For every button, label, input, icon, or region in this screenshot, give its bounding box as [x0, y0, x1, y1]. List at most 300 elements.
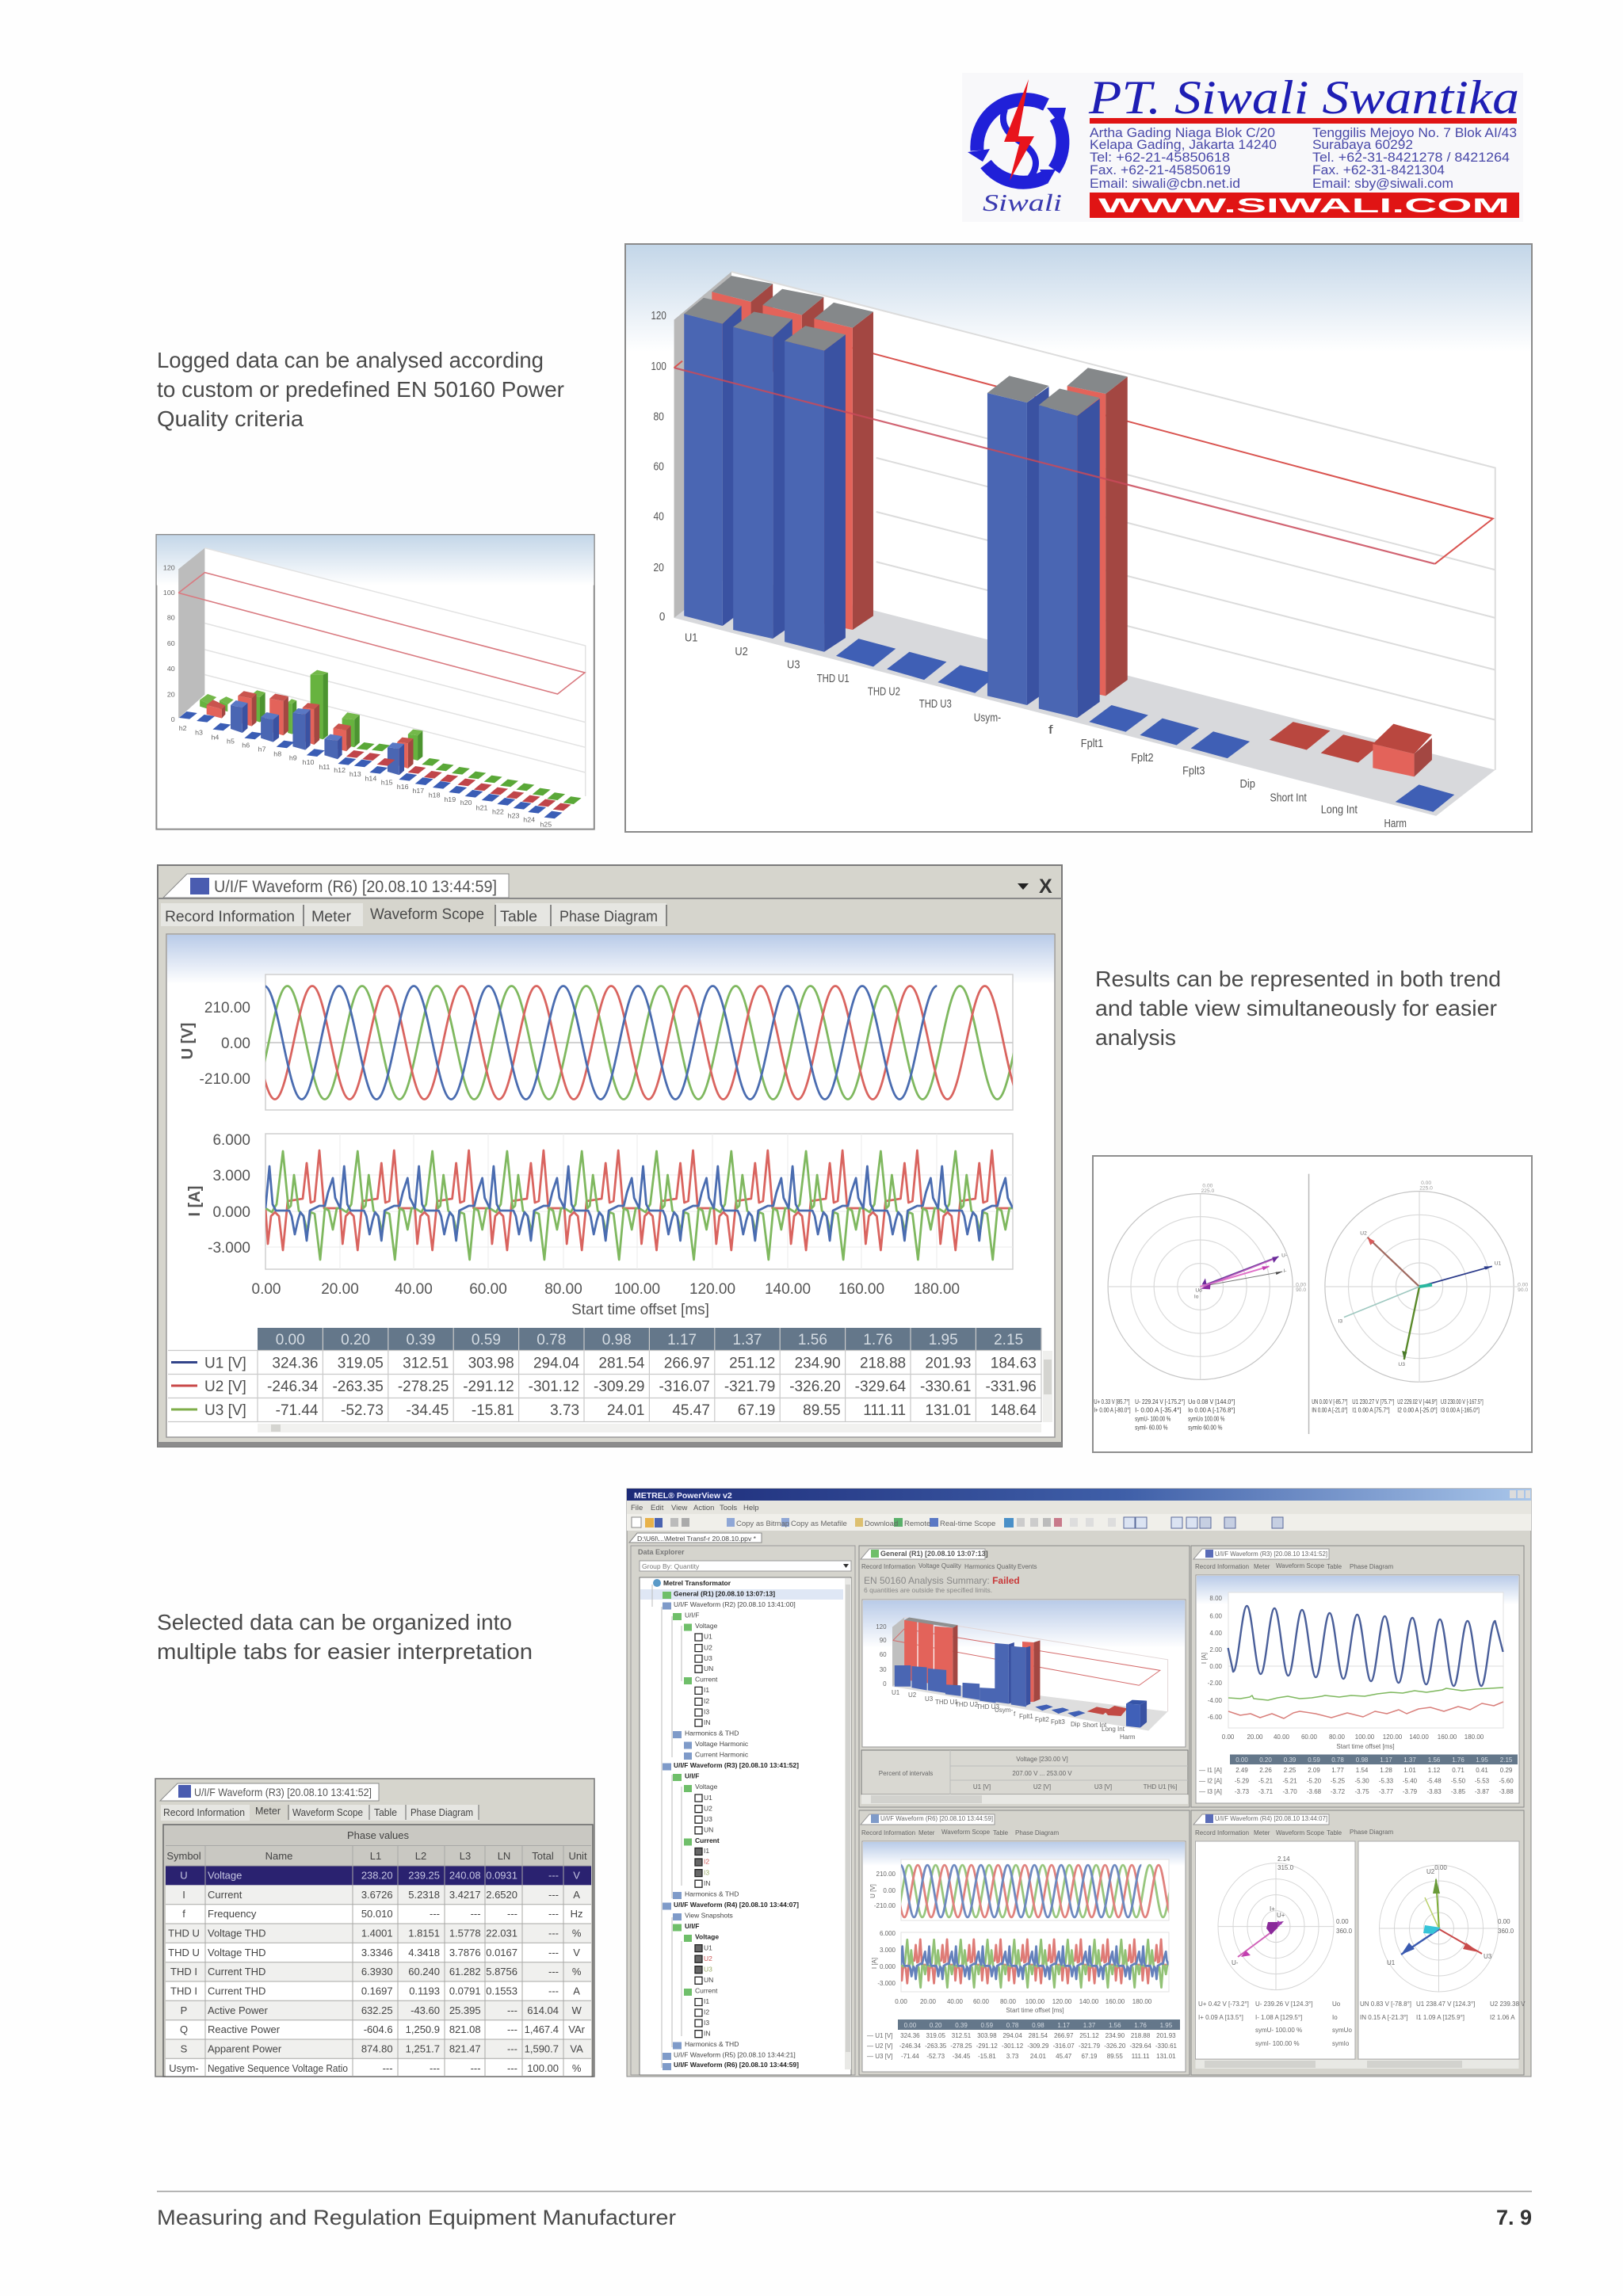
panel: meter table window: [155, 1779, 594, 2077]
sub tabs: Record Information: [165, 909, 295, 925]
pane: R3 current waveform: 0.00: [1222, 1733, 1235, 1741]
pane: R6 waveform thumbnail: 0.20: [930, 2022, 942, 2029]
category labels: U1: [685, 631, 697, 645]
current axis labels: 3.000: [212, 1168, 250, 1184]
flat harmonic tiles: [179, 711, 562, 818]
pane: R3 current waveform: -5.60: [1499, 1778, 1514, 1784]
phase diagram right: 0.00: [1421, 1180, 1432, 1186]
data rows: THD I: [170, 1985, 197, 1997]
phase diagram right: 90.0: [1518, 1287, 1529, 1293]
data rows: %: [572, 1966, 582, 1978]
phase values text right: U3 230.00 V [-167.5°]: [1441, 1398, 1484, 1405]
logo website band: WWW.SIWALI.COM: [1098, 195, 1510, 217]
pane: R6 waveform thumbnail: 24.01: [1030, 2053, 1046, 2060]
data rows: S: [181, 2042, 188, 2055]
data rows: 0.1553: [486, 1985, 517, 1997]
mini phase right: 0.00: [1434, 1864, 1447, 1871]
pane: R3 current waveform: 4.00: [1209, 1630, 1223, 1637]
phase values text left: Io 0.00 A [-176.8°]: [1188, 1406, 1235, 1414]
phase diagram left: Uo: [1195, 1288, 1202, 1294]
data rows: 2.6520: [486, 1889, 517, 1901]
pane: R3 current waveform: -3.87: [1475, 1788, 1490, 1795]
mini 3D chart: Long Int: [1102, 1726, 1125, 1733]
data rows: 25.395: [449, 2004, 481, 2016]
tree box: I1: [704, 1686, 709, 1694]
data rows: 1.8151: [408, 1927, 440, 1939]
panel: PowerView software screenshot: [627, 1489, 1531, 2077]
data table: 0.39: [407, 1332, 435, 1348]
tree box: U2: [704, 1804, 712, 1812]
pane: R3 current waveform: Table: [1327, 1563, 1342, 1570]
sub tabs: Phase Diagram: [559, 909, 658, 925]
pane: R6 waveform thumbnail: Meter: [918, 1829, 935, 1836]
phase diagram left: I-: [1283, 1268, 1286, 1274]
phase values text left: symIo 60.00 %: [1188, 1424, 1223, 1431]
pane: R6 waveform thumbnail: Table: [993, 1829, 1009, 1836]
pane: R3 current waveform: Waveform Scope: [1276, 1562, 1325, 1569]
time axis: 40.00: [395, 1281, 433, 1298]
phase values text left: [1094, 1398, 1235, 1431]
pane: R6 waveform thumbnail: 131.01: [1156, 2053, 1176, 2060]
pane: R4 phase diagrams: Waveform Scope: [1276, 1829, 1325, 1836]
menu bar: [627, 1501, 1531, 1514]
tree box: U/I/F Waveform (R6) [20.08.10 13:44:59]: [674, 2061, 799, 2069]
pane: R6 waveform thumbnail: 80.00: [1000, 1998, 1017, 2005]
pane: R3 current waveform: -3.71: [1258, 1788, 1274, 1795]
harmonic labels: h15: [381, 779, 393, 786]
category labels: THD U3: [919, 697, 952, 711]
data table: -330.61: [920, 1379, 972, 1395]
y axis labels: [651, 309, 666, 624]
time axis: 160.00: [838, 1281, 884, 1298]
pane: R3 current waveform: 2.15: [1500, 1756, 1513, 1764]
harmonic labels: h10: [303, 758, 315, 766]
tree box: U1: [704, 1633, 712, 1641]
phase values text: U+ 0.42 V [-73.2°]: [1198, 2000, 1249, 2008]
y axis labels: 40: [167, 665, 175, 673]
data rows: 1.4001: [361, 1927, 393, 1939]
phase values text: Io: [1332, 2014, 1338, 2021]
data rows: ---: [548, 1927, 559, 1939]
time axis: 80.00: [544, 1281, 582, 1298]
pane: R6 waveform thumbnail: 45.47: [1056, 2053, 1072, 2060]
logo address right: [1312, 125, 1517, 191]
data table: 0.98: [602, 1332, 632, 1348]
pane: R6 waveform thumbnail: 0.78: [1006, 2022, 1019, 2029]
data table: -263.35: [332, 1379, 384, 1395]
y axis labels: 100: [651, 360, 666, 373]
pane: R3 current waveform: Start time offset [ms]: [1336, 1743, 1395, 1750]
pane: R6 waveform thumbnail: -330.61: [1155, 2042, 1178, 2050]
selected row: 240.08: [449, 1870, 481, 1881]
data rows: THD U: [168, 1947, 200, 1958]
pane: R6 waveform thumbnail: -246.34: [899, 2042, 922, 2050]
meter table: L3: [460, 1850, 471, 1862]
phase diagram left: 225.0: [1201, 1188, 1215, 1194]
data rows: ---: [507, 2042, 517, 2055]
pane: general EN 50160 summary: Events: [1018, 1563, 1037, 1570]
harmonic labels: h19: [444, 795, 456, 803]
pane: R3 current waveform: 60.00: [1301, 1733, 1318, 1741]
data rows: Frequency: [208, 1908, 257, 1920]
phase diagram left: 90.0: [1296, 1287, 1307, 1293]
pane: R3 current waveform: 1.12: [1428, 1767, 1441, 1774]
data rows: 821.08: [449, 2023, 481, 2035]
toolbar: Remote: [904, 1520, 930, 1528]
y axis labels: 20: [653, 561, 664, 574]
phase diagram left: 0.00: [1296, 1283, 1307, 1287]
meter sub tabs: Waveform Scope: [292, 1806, 363, 1818]
mini 3D chart: 120: [876, 1623, 887, 1630]
phase values text left: U+ 0.33 V [85.7°]: [1094, 1398, 1129, 1405]
mini 3D chart: THD U1: [935, 1699, 958, 1706]
mini 3D chart: THD U2: [955, 1701, 978, 1708]
data table: -278.25: [398, 1379, 449, 1395]
text block: results: Results can be represented in both trend: [1095, 967, 1501, 991]
tree box: Harmonics & THD: [685, 1890, 739, 1897]
harmonic labels: h5: [227, 738, 235, 746]
pane: R6 waveform thumbnail: — U3 [V]: [867, 2053, 892, 2060]
mini phase left: [1218, 1855, 1353, 1990]
data rows: 61.282: [449, 1966, 481, 1978]
phase values text right: U1 230.27 V [75.7°]: [1352, 1398, 1394, 1405]
mini phase left: 315.0: [1277, 1864, 1294, 1871]
pane: R6 waveform thumbnail: -309.29: [1027, 2042, 1049, 2050]
pane: R6 waveform thumbnail: 120.00: [1052, 1998, 1072, 2005]
category labels: Harm: [1384, 817, 1407, 830]
voltage axis labels: -210.00: [200, 1071, 250, 1088]
tree box: Voltage: [695, 1622, 718, 1630]
panel: small 3D harmonics bar chart: [156, 535, 594, 830]
pane: R6 waveform thumbnail: -291.12: [976, 2042, 998, 2050]
harmonic labels: h8: [273, 750, 281, 757]
data rows: V: [573, 1947, 580, 1958]
pane: R3 current waveform: -2.00: [1208, 1680, 1223, 1687]
tree box: U/I/F Waveform (R2) [20.08.10 13:41:00]: [674, 1600, 796, 1608]
data table: -309.29: [594, 1379, 645, 1395]
pane: R6 waveform thumbnail: 160.00: [1106, 1998, 1125, 2005]
phase values text right: I2 0.00 A [-25.0°]: [1397, 1406, 1438, 1414]
tree box: Voltage: [695, 1783, 718, 1791]
pane: R6 waveform thumbnail: 312.51: [952, 2032, 972, 2039]
pane: R3 current waveform: -5.21: [1258, 1778, 1274, 1784]
voltage chart: U [V]: [179, 1023, 197, 1059]
current axis labels: [208, 1132, 250, 1257]
data table: 89.55: [803, 1402, 841, 1419]
category labels: Short Int: [1270, 791, 1307, 805]
category labels: THD U1: [817, 672, 850, 685]
y axis labels: 80: [653, 410, 664, 423]
phase values text left: I- 0.00 A [-35.4°]: [1135, 1406, 1182, 1414]
phase values text: U1 238.47 V [124.3°]: [1416, 2000, 1475, 2008]
current chart: I [A]: [186, 1186, 204, 1216]
sub tabs: [161, 903, 666, 926]
logo address left: Email: siwali@cbn.net.id: [1090, 176, 1240, 191]
data rows: 1,250.9: [406, 2023, 440, 2035]
tree box: U/I/F: [685, 1922, 699, 1930]
phase values text left: Uo 0.08 V [144.0°]: [1188, 1398, 1235, 1405]
tree box: U/I/F Waveform (R3) [20.08.10 13:41:52]: [674, 1761, 799, 1769]
data rows: 50.010: [361, 1908, 393, 1920]
y axis labels: 20: [167, 691, 175, 698]
category labels: Dip: [1239, 777, 1255, 791]
data table: -246.34: [267, 1379, 319, 1395]
phase diagram left: [1108, 1184, 1307, 1379]
tree box: U1: [704, 1943, 712, 1951]
tree box: Current Harmonic: [695, 1751, 749, 1759]
mini 3D chart: U1: [892, 1689, 900, 1696]
logo address left: Fax. +62-21-45850619: [1090, 162, 1231, 177]
tree box: Metrel Transformator: [663, 1579, 731, 1587]
y axis labels: 60: [653, 460, 664, 473]
mini 3D chart: Harm: [1120, 1733, 1136, 1741]
logo address right: Fax. +62-31-8421304: [1312, 162, 1445, 177]
tree box: U/I/F: [685, 1611, 699, 1619]
data table: 312.51: [403, 1355, 449, 1372]
toolbar: Real-time Scope: [940, 1520, 995, 1528]
pane: R6 waveform thumbnail: 303.98: [977, 2032, 997, 2039]
data rows: Voltage THD: [208, 1947, 265, 1958]
sub tabs: Table: [500, 909, 537, 925]
phase values text right: IN 0.00 A [-21.0°]: [1312, 1406, 1347, 1414]
pane: R3 current waveform: 0.71: [1452, 1767, 1465, 1774]
mini phase left: 2.14: [1277, 1855, 1290, 1863]
pane: R3 current waveform: -4.00: [1208, 1697, 1223, 1704]
voltage axis labels: [200, 1000, 250, 1088]
data rows: 1,251.7: [406, 2042, 440, 2055]
tree box: Voltage: [695, 1933, 719, 1941]
data table: 67.19: [738, 1402, 775, 1419]
mini 3D chart: U2: [908, 1691, 917, 1699]
category labels: [685, 631, 1407, 830]
pane: R3 current waveform: 0.29: [1500, 1767, 1513, 1774]
data rows: 100.00: [527, 2062, 559, 2074]
current axis labels: -3.000: [208, 1240, 250, 1257]
data table: U1 [V]: [204, 1355, 246, 1372]
pane: R4 phase diagrams: Table: [1327, 1829, 1342, 1836]
selected row: U: [180, 1870, 188, 1881]
phase values text right: [1312, 1398, 1484, 1414]
current axis labels: 0.000: [212, 1204, 250, 1221]
pane: R3 current waveform: 180.00: [1465, 1733, 1484, 1741]
window tab: [163, 874, 509, 898]
pane: R3 current waveform: 0.41: [1476, 1767, 1488, 1774]
data rows: ---: [430, 2062, 440, 2074]
data rows: ---: [383, 2062, 393, 2074]
pane: R6 waveform thumbnail: 319.05: [926, 2032, 945, 2039]
pane: R3 current waveform: 140.00: [1409, 1733, 1429, 1741]
phase values text right: U2 229.02 V [-44.9°]: [1397, 1398, 1438, 1405]
data rows: 632.25: [361, 2004, 393, 2016]
data table: 1.37: [733, 1332, 762, 1348]
meter sub tabs: Table: [374, 1806, 397, 1818]
pane: R6 waveform thumbnail: 0.00: [895, 1998, 907, 2005]
pane: R6 waveform thumbnail: [859, 1810, 1190, 2075]
pane: R6 waveform thumbnail: 67.19: [1081, 2053, 1098, 2060]
data rows: W: [571, 2004, 582, 2016]
pane: R6 waveform thumbnail: 1.95: [1160, 2022, 1173, 2029]
harmonic labels: h20: [460, 799, 472, 807]
tree box: I1: [704, 1847, 709, 1855]
logo address left: Artha Gading Niaga Blok C/20: [1090, 125, 1275, 140]
pane: general EN 50160 summary: 6 quantities are outside the specified limits.: [864, 1586, 992, 1594]
tree box: I3: [704, 2019, 709, 2027]
data table: 148.64: [991, 1402, 1037, 1419]
tree box: IN: [704, 2029, 710, 2037]
phase values text left: symI- 60.00 %: [1135, 1424, 1168, 1431]
footer: manufacturer text: Measuring and Regulation Equipment Manufacturer: [157, 2206, 676, 2229]
mini 3D chart: Dip: [1071, 1721, 1081, 1728]
pane: R6 waveform thumbnail: U [V]: [869, 1884, 876, 1898]
phase diagram right: I3: [1338, 1319, 1343, 1324]
data table: 24.01: [607, 1402, 645, 1419]
harmonic labels: h17: [412, 787, 425, 795]
mini phase left: U-: [1232, 1959, 1239, 1966]
pane: R6 waveform thumbnail: 281.54: [1029, 2032, 1048, 2039]
data rows: P: [181, 2004, 187, 2016]
text block: selected data: multiple tabs for easier interpretation: [157, 1639, 533, 1664]
pane: R6 waveform thumbnail: Record Information: [861, 1829, 915, 1836]
data table: 294.04: [533, 1355, 580, 1372]
phase values text: I2 1.06 A: [1490, 2014, 1515, 2021]
y axis labels: 0: [171, 715, 175, 723]
pane: R3 current waveform: -5.50: [1451, 1778, 1466, 1784]
pane: R4 phase diagrams: Meter: [1254, 1829, 1270, 1836]
data rows: Current THD: [208, 1966, 265, 1978]
document tab: D:\U6I\...\Metrel Transf-r 20.08.10.ppv *: [637, 1535, 757, 1543]
data rows: 874.80: [361, 2042, 393, 2055]
text block: logged data: to custom or predefined EN 50160 Power: [157, 377, 564, 402]
data rows: 1.5778: [449, 1927, 481, 1939]
pane: R6 waveform thumbnail: 1.56: [1109, 2022, 1121, 2029]
mini 3D chart: Short Int: [1083, 1722, 1107, 1729]
pane: R3 current waveform: 100.00: [1355, 1733, 1375, 1741]
pane: R3 current waveform: -3.83: [1426, 1788, 1442, 1795]
pane: R6 waveform thumbnail: I [A]: [871, 1958, 878, 1969]
phase values text: U2 239.38 V: [1490, 2000, 1526, 2008]
pane: R3 current waveform: 2.09: [1308, 1767, 1320, 1774]
pane: R3 current waveform: -5.29: [1235, 1778, 1250, 1784]
quality table: U2 [V]: [1033, 1783, 1051, 1791]
pane: R6 waveform thumbnail: 324.36: [900, 2032, 920, 2039]
pane: R6 waveform thumbnail: 0.000: [880, 1963, 896, 1970]
data table: 303.98: [468, 1355, 514, 1372]
data rows: 3.6726: [361, 1889, 393, 1901]
data table: 1.95: [929, 1332, 958, 1348]
phase values text: symU- 100.00 %: [1255, 2027, 1302, 2034]
pane: R3 current waveform: -3.73: [1235, 1788, 1250, 1795]
data rows: ---: [430, 1908, 440, 1920]
harmonic labels: h16: [397, 783, 409, 791]
pane: R6 waveform thumbnail: 0.39: [955, 2022, 968, 2029]
data rows: 3.4217: [449, 1889, 481, 1901]
data rows: 22.031: [486, 1927, 517, 1939]
mini phase left: I+: [1270, 1905, 1275, 1913]
data table: 319.05: [338, 1355, 384, 1372]
time axis: Start time offset [ms]: [571, 1302, 709, 1318]
category labels: Fplt1: [1081, 737, 1103, 750]
phase diagram right: 225.0: [1419, 1186, 1433, 1192]
data table: 281.54: [598, 1355, 645, 1372]
data table: U3 [V]: [204, 1402, 246, 1419]
pane: R6 waveform thumbnail: -321.79: [1079, 2042, 1101, 2050]
text block: logged data: [157, 348, 564, 431]
pane: R6 waveform thumbnail: 0.00: [883, 1887, 896, 1894]
tree box: Current: [695, 1675, 718, 1683]
mini 3D chart: U3: [925, 1695, 934, 1703]
window tab: U/I/F Waveform (R6) [20.08.10 13:44:59]: [214, 878, 497, 896]
harmonic bars: [200, 670, 422, 775]
logo address right: Tenggilis Mejoyo No. 7 Blok AI/43: [1312, 125, 1517, 140]
phase values text: I+ 0.09 A [13.5°]: [1198, 2014, 1243, 2021]
category labels: Fplt3: [1182, 765, 1205, 777]
quality table: U3 [V]: [1094, 1783, 1112, 1791]
data rows: 0.0167: [486, 1947, 517, 1958]
quality table: [861, 1750, 1188, 1804]
data table: U2 [V]: [204, 1379, 246, 1395]
mini 3D chart: [862, 1600, 1186, 1747]
phase diagram right: U2: [1360, 1231, 1367, 1236]
meter table: LN: [498, 1850, 510, 1862]
meter table: [163, 1825, 593, 2077]
pane: R6 waveform thumbnail: — U2 [V]: [867, 2042, 892, 2050]
pane: R3 current waveform: 2.25: [1284, 1767, 1296, 1774]
harmonic labels: h25: [540, 821, 552, 829]
phase values text: symUo: [1332, 2027, 1352, 2034]
pane: R3 current waveform: -5.25: [1331, 1778, 1346, 1784]
pane: R4 phase diagrams: Phase Diagram: [1350, 1829, 1393, 1836]
pane: R3 current waveform: 120.00: [1383, 1733, 1403, 1741]
tree box: U3: [704, 1965, 712, 1973]
data rows: Q: [180, 2023, 188, 2035]
harmonic labels: h9: [289, 754, 297, 761]
meter sub tabs: Meter: [255, 1805, 281, 1817]
data table: -15.81: [472, 1402, 514, 1419]
quality table: THD U1 [%]: [1144, 1783, 1177, 1791]
tree box: I2: [704, 1697, 709, 1705]
pane: R6 waveform thumbnail: -71.44: [901, 2053, 919, 2060]
logo address right: Surabaya 60292: [1312, 137, 1413, 152]
tree box: Current: [695, 1987, 718, 1995]
pane: R3 current waveform: -5.40: [1403, 1778, 1418, 1784]
data rows: 5.8756: [486, 1966, 517, 1978]
data rows: %: [572, 1927, 582, 1939]
pane: R6 waveform thumbnail: — U1 [V]: [867, 2032, 892, 2039]
text block: logged data: Quality criteria: [157, 406, 304, 431]
pane: R3 current waveform: 1.54: [1356, 1767, 1369, 1774]
phase values text left: I+ 0.00 A [-80.0°]: [1094, 1406, 1131, 1414]
pane: R6 waveform thumbnail: 40.00: [947, 1998, 964, 2005]
tree box: I2: [704, 1858, 709, 1866]
pane: R6 waveform thumbnail: U/I/F Waveform (R6) [20.08.10 13:44:59]: [880, 1814, 993, 1822]
pane: R6 waveform thumbnail: Phase Diagram: [1015, 1829, 1059, 1836]
pane: R6 waveform thumbnail: 100.00: [1025, 1998, 1045, 2005]
menu bar: Edit: [651, 1504, 664, 1512]
pane: R3 current waveform: 80.00: [1329, 1733, 1346, 1741]
logo address left: Tel: +62-21-45850618: [1090, 150, 1230, 165]
data table: -34.45: [406, 1402, 449, 1419]
time axis: 120.00: [689, 1281, 735, 1298]
data table: -316.07: [659, 1379, 710, 1395]
harmonic labels: h21: [476, 804, 488, 812]
data rows: THD I: [170, 1966, 197, 1978]
phase diagram right: [1325, 1180, 1529, 1383]
data rows: ---: [507, 2023, 517, 2035]
pane: R6 waveform thumbnail: -301.12: [1002, 2042, 1024, 2050]
pane: R3 current waveform: 0.59: [1308, 1756, 1320, 1764]
pane: R6 waveform thumbnail: -3.000: [877, 1980, 896, 1987]
category labels: U2: [735, 645, 748, 658]
